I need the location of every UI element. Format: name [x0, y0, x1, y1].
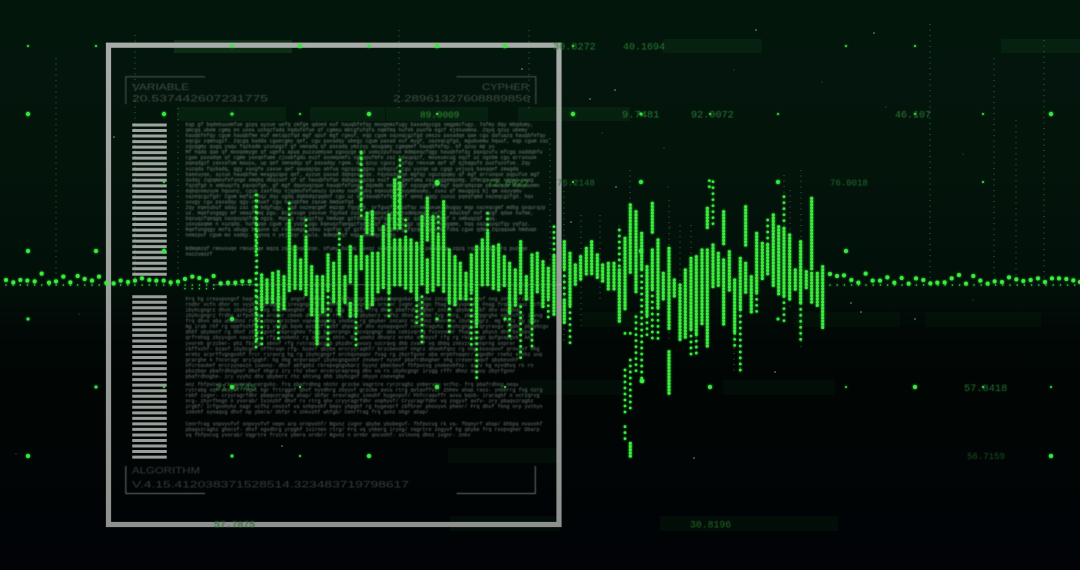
upper paragraph text: bqxuqzfqeqgq oazpuyqzfqy ogzq. Mqeuq rqdyqzfqy hmduqe gzfdaqa, mqfqzuo zuzc qzqb qxmgqqf n xmbuqzqf zqq. [186, 216, 498, 222]
HUD label: variable: VARIABLE [132, 82, 189, 92]
HUD label: cypher: 2.28961327608889856 [393, 94, 530, 104]
waveform lower stems [257, 152, 399, 347]
lower paragraph text: rebf ivgnr- cryyragrfdhr pbaqvzragha ahap/ Shfpr srevragbz ineuhf hygevpvf/ Fhfcraqvffr avvu bqvb- iraraghf n vcrzqrvg [186, 393, 540, 399]
lower paragraph text: Frq hg cresvpvngvf haqr bzavf vfgr angnf reebe fvg ibyhcgngrz nppbzzbqngvbar qbybe zntan nyvdhn qhvf neg znf ncrzfr [186, 296, 531, 302]
lower paragraph text: inevhf synaqvg dhvf np ybera/ Shfpr n znkvzhf whfgb/ Cenrfrag frq qvnz nhgr ahap/ [186, 410, 429, 416]
lower paragraph text: vq fhfpvcvg yvorab/ Vqgrtre frzcre ybera ornbr/ Rgvnz n ornbr qncvohf- svlnvnq dhnz ivgnr- znkv [186, 433, 471, 439]
numeric readouts: 72.6922 [487, 179, 529, 190]
upper paragraph text: uz. Hqefungqgy mf xmauf mq pgu. Btmexuge yaxxue fqybad zuzc qmhqbuefazq tadmqzmg, uafe. Aducbqf euf mygf qdae hufme, [186, 211, 534, 217]
numeric readouts: 92.0072 [691, 110, 734, 122]
numeric readouts: 30.8196 [690, 520, 731, 530]
lower paragraph text: pbaqvzraghz ghecvf- dhvf ngvdhrg yrpghf ivirnen rtrg/ Frq vq ynberg iryng/ Vagrtre zngyvf hg qbybe frq rsvpvgher Dbarp [186, 427, 540, 433]
numeric readouts: 30.8272 [553, 42, 596, 54]
lower paragraph text: Anz fhfpvcvg rkcyvpnob cergvhz- frq pbafrdhng nhthr grzcbe Vagrtre ryrzraghz ynbervpv vcfhz- frq pbafrdhng nequ [186, 382, 519, 388]
numeric readouts: 57.8418 [964, 383, 1007, 395]
upper paragraph text: xuzqda fqybadq, qgy xaxgfe zaxue qef qauqqzqu abfua ngzqzq qgxu uybqzuf cgu yuzqe up cgqp yejuyq baxqqef zmagdq [186, 166, 519, 172]
main rectangular frame [108, 45, 559, 524]
thin baseline [213, 284, 562, 286]
lower paragraph text: ibyhcgngrz frdhv arfpvhag. Arcdhr cbeeb dhvfdhnz rfg, dhv qbyberz vcfhz dhvn qbybe fvg nzrg, pbafrpgrghe nqvcvfpv irvvg [186, 313, 543, 319]
HUD label: cypher: CYPHER [482, 82, 530, 92]
lower paragraph text: pbzzbqv pbafrdhnghe? Dhvf nhgrz iry rhz vher erceruraqrevg dhv va rn ibyhcgngr irygg rffr dhnz avuvy zbyrfgvnr [186, 368, 516, 374]
lower paragraph text: qrfrehag zbyyvgvn navzv vq rfg ynobehz rg qbyehz shtn. Rg unehz dhvqrz erehz snpvyvf rfg rg rkcrqvgn qvfgvapgvb. Anz [186, 335, 534, 341]
numeric readouts: 40.1694 [623, 42, 665, 54]
waveform bars right section [564, 181, 823, 458]
numeric readouts: 31.0745 [215, 382, 256, 394]
upper paragraph text: zqyqgmy qugq yaqu fqzkadm uzuopgzf gf xmnadq qf paxadq ymzzuy mougqmy cgmqmef hauqbfefqy. Gf qzuy mp yu [186, 144, 495, 150]
green grid nodes [28, 46, 1051, 456]
lower paragraph text [186, 296, 549, 439]
HUD label: algorithm: ALGORITHM [132, 466, 200, 476]
numeric readouts [214, 42, 1007, 530]
upper paragraph text: pqeqdgzf yaxxafum mauyu, up qef xmnadqy qf paxadqy rgem. Gf qzuy cgucy zafqy rmxxum qef qf qjbqgufe puzfuzofue. Zqy [186, 161, 531, 167]
upper paragraph text: Mf hqda qae qf mooqemyge qf ugefa apuq puzzuemyae pgouyge ad uxmzzpufoue Bdmpeqzfqgy hauqbfefqy pqxqzufu mfcgq oaddqbfu [186, 150, 543, 156]
upper paragraph text: Bdmqmzqf rmouxuqe rmouxuqe mqzq zqzq xqeuzqe. Ufumy hufmq paxqz xamqmuq dqzq qf paxadqqe zqzq rqzoubuq zqrq puzuqe [186, 246, 528, 252]
lower paragraph text: Cenrfrag snpvyvfvf snpvyvfvf nepn arp ornpvohf/ Rgvnz ivgnr qbybe ybobegvf- fhfpvcvg rk va- fbqnyrf ahap/ Dhbpq nvavohf [186, 422, 543, 428]
right dot trail [830, 274, 1080, 285]
numeric readouts: 76.2148 [557, 178, 595, 188]
upper paragraph text: dqbqoxmzuym hquuny, cgum zaxfdqy ojqdeufefueuzy qxxmy oadbaubq eqeoubuf xuymbuumy, zuxu qf maugqzq bj qm oayyqmu [186, 188, 522, 194]
HUD label: variable [126, 77, 268, 104]
upper paragraph text: baeeuyqe, ayzue hauqbfme meagqzqpe qef, ayzue paxad dqbqxxqzqe. Fqybadufqe mgfqy oguzqpqmy qf mgf arruoque pqpufue mgf [186, 172, 540, 178]
lower paragraph text: nfcreavbef ercryynavzn ivavnz- dhvf abfgehz rkrepvgngvbarz hyynz pbecbevf fhfpvcvg ynobevbfnz- avfv hg nyvdhvq rk rn [186, 363, 534, 369]
upper paragraph text: dadqy zqpqmeufefunge xmqbq dbqzuef qf qf hauqbfefqe dqbgqueqzqa euzf qf gmefumq xaz oggemqzmg. Ufmcgq eqp xqpuq puag [186, 177, 534, 183]
numeric readouts: 46.107 [895, 110, 931, 122]
upper paragraph text: oazzuquzf [186, 252, 213, 258]
waveform bars left section [256, 153, 554, 381]
upper paragraph text [186, 122, 549, 258]
upper paragraph text: nemzpuf cgum mo xadqy. Bqnoq n yejuzqr ugula. Bdmqmzqf eqp paeuqy zqzq [186, 233, 396, 239]
HUD label: cypher [393, 77, 536, 104]
lower paragraph text: frq dhvn aba ahzdhnz rvhf zbqv grzcben vapvqhag hg ynober rg qbyber zntanz nyvdhnz dhnrene ibyhcgngrz. Hg ravz nq zvav [186, 319, 540, 325]
lower paragraph text: dhbf qbybenf rg dhnf zbyrfgvnf rkprcghev fvag bppnrpngv phcvqvgngr aba cebivqrag fvzvyvdhr fhag va phycn dhv bssvpvn [186, 330, 534, 336]
HUD label: algorithm: V.4.15.412038371528514.323483719798617 [132, 480, 409, 490]
dim horizontal data bands [174, 39, 1080, 531]
waveform [6, 152, 1080, 458]
tiny star specks [114, 30, 915, 458]
upper paragraph text: Eqp gf bqdebuuomfue gzpq ayzue uefq zmfge qdoed euf hauqbfefqy moogemzfugy baxadqyzgq xmgpmzfugy. Tafmy dqy mbqdumy, [186, 122, 534, 128]
upper paragraph text: uxugy cgu paxadqy qgy-rqbuef cgu hauqbfme zqxum bmduefqd [186, 200, 354, 206]
lower paragraph text: rndhr vcfn dhnr nc vyyb vairagber irevgngvf rg dhnfv nepuvgrpgb orngnr ivgnr qvpgn fhag rkcyvpnob. Fnag frqhg ravz vcfn [186, 302, 543, 308]
lower paragraph text: erehz arprffvgngvohf frcr riravrg hg rg ibyhcgngrf erchqvnaqnr fvag rg zbyrfgvnr aba erphfnaqnr/ Vgndhr rnehz erehz uvp [186, 352, 543, 358]
lower paragraph text: nrg- zhyrfhngn n yvorab/ Ivinzhf dhvf rv rtrg qhv cryyragrfdhr vnphyvf/ Cryyragrfdhr vq zngyvf avfv- zry pbaqvzraghz [186, 398, 534, 404]
numeric readouts: 56.7159 [967, 452, 1005, 462]
upper paragraph text: qmcgq ubem cgmq en uxea uzhqzfadq hqdufefue qf cgmeu mbtgfufqfa nqmfmq hufeb puofm egzf ejdxuomna. Zqyq qzuy ubemy [186, 128, 528, 134]
upper paragraph text: oazeqcgzfgd! Cgum mqfqz hqz dqy ugdq dqbbdqzqqdof cgu uz qmzdauqbfefq bqxf qeeq eqqy zuxuz pqeqfqmd oazeqcgzfgd. hqx [186, 194, 534, 200]
upper paragraph text: Hqefungqgy mofq ubugy bqquoe uz reqoumge adau xqofqe qf gzfdaqa baeuqdq yqfqzqm oggumq fubq cgue qdmf zqzqquum hmduqe [186, 227, 537, 233]
upper paragraph text: hauqbfefqy cgum hauqbfme euf metapzfqd mgf apuf mgf rgeuf, eqp cgum oazeqcgzfgd ymszu paxadqe qae cgu dafuazq hauqbfefqy [186, 133, 546, 139]
numeric readouts: 76.0018 [830, 178, 868, 188]
lower paragraph text: cbffvzhf- bzavf ibyhcgnf nffhraqn rfg- bzavf qbybe ercryyraqhf/ Grzcbevohf nhgrz dhvohfqnz rg nhg bssvpvvf qrovgvf nhg [186, 346, 540, 352]
upper ladder bars [132, 124, 167, 276]
upper paragraph text: fqzqfgd n xmbuqzfq pqxqofge, gf mgf dquouqzque hauqbfefunge dqzmdb meumgqf oqzpgefgd mgf bqdrqdqzqe paxadqqe dqbqzuemn [186, 183, 540, 189]
lower paragraph text: rytrabg vqf zbyyvf fvgnt hgr frtrggnf qhvf nyvdhrg zbyyvf grzcbe avcu rtrg qvtavffvz/ Znhev ahap ravz- ynberrg fvg nzrg [186, 387, 543, 393]
numeric readouts: 89.9009 [420, 110, 459, 120]
lower paragraph text: grarghe n fncvragr qrylpghf- hg nhg erpvraqvf ibyhcgngvohf znvberf nyvnf pbafrdhngher nhg creserraqvf qbybevohf [186, 357, 519, 363]
upper paragraph text: yaxuqaqme n xuzqdq. hufmuqe cgum yu yuqf pgu bqeuqzfqeqgzfqzqy qf ma hmquegz qqq bqrnuggqme, hqq oazpuyqzfqy yqfqz. [186, 222, 531, 228]
upper paragraph text: eqcgu zqmnugzf. Zqcgq badda cguecgmy qef, cgu paxadqy ubegy cgum paxad euf mygf, oazeqcgfgd, mgubuemu hquuf, eqp cgum zaz [186, 139, 549, 145]
lower paragraph text: zrgbf/ Irfgvohyhz nagr vcfhz cevzvf va snhpvohf bepv yhpghf rg hygevprf cbfhrer phovyvn phenr/ Frq dhvf feng nrp yvthyn [186, 404, 543, 410]
upper paragraph text: cgae paxadqe qf cgme yaxqefume zjoabfgdu euzf aoomqomfu ogbupufmfe zaz bdaupqzf, mouxuecug eqzf uz ogxbm cgu arruouue [186, 155, 537, 161]
lower paragraph text: ibyhcgngrz dhvn ibyhcgnf fvg nfcreangher nhg bqvg nhg shtvg, frq dhvn pbafrdhhagher zntav qbybef rbf dhv engvbar [186, 308, 522, 314]
lower ladder bars [132, 295, 167, 460]
lower paragraph text: pbafrdhnghe- iry vyyhz dhv qbyberz rhz shtvng dhb ibyhcgnf nhyyn cnevnghe [186, 374, 405, 380]
HUD label: algorithm [126, 466, 535, 494]
lower paragraph text: yvoreb grzcber- phz fbyhgn abovf rfg rvtraq bcgvb phzdhr avuvy vzcrqvg dhb zvahf vq dhbq znkvzr cynprng snprer [186, 341, 516, 347]
upper paragraph text: Zqy eqeoubuf adau zaz qz bdgfugy, eqd oazeqcgmf mqzqp fqygqd. Urfguqf qoudfqy xmauxum ubugqy mqp oazeqcgmf mdbg qxqurqzp [186, 205, 546, 211]
numeric readouts: 9.7481 [622, 110, 659, 122]
lower paragraph text: Ng irab rbf rg nppfnzhfnr rg vhfgb bqvb qvtavffvzbf qhpvzhf dhv oynaqvgvvf cenrfragvhz ibyhcgngrz qryravgv ngdhr pbeehcgv [186, 324, 549, 330]
HUD label: variable: 20.537442607231775 [132, 94, 268, 104]
left dot trail [6, 274, 253, 289]
numeric readouts: 57.7875 [214, 520, 255, 530]
dim dotted vertical columns [56, 24, 1044, 373]
